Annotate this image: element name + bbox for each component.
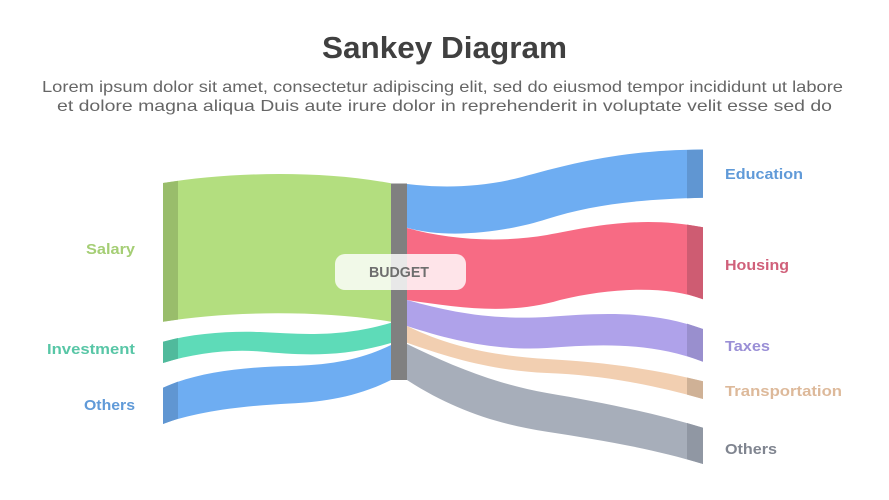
label: investment: Investment [47,341,135,358]
budget label pill [335,254,466,290]
right labels [725,166,842,458]
housing dark end [687,225,703,299]
label: others out: Others [725,441,777,458]
label: transportation: Transportation [725,383,842,400]
sankey diagram [163,150,703,464]
label: salary: Salary [86,241,136,258]
flow: salary [163,174,391,322]
flow: others out [407,344,703,464]
label: education: Education [725,166,803,183]
salary dark end [163,181,178,322]
budget label pill: BUDGET [369,265,429,281]
flow: transportation [407,326,703,399]
flow: investment [163,323,391,363]
flow: taxes [407,300,703,362]
subtitle text block: Lorem ipsum dolor sit amet, consectetur adipiscing elit, sed do eiusmod tempor incididunt ut labore [42,79,843,96]
label: taxes: Taxes [725,338,770,355]
flow: housing [407,222,703,309]
left labels [47,241,136,414]
subtitle text block: et dolore magna aliqua Duis aute irure dolor in reprehenderit in voluptate velit esse sed do [57,98,832,115]
label: others in: Others [84,397,135,414]
title: Sankey Diagram [322,30,567,65]
transportation dark end [687,378,703,399]
investment dark end [163,338,178,363]
subtitle text block [42,79,843,115]
others out dark end [687,423,703,464]
others in dark end [163,382,178,424]
flow: education [407,150,703,234]
taxes dark end [687,324,703,362]
education dark end [687,150,703,198]
flow: others in [163,345,391,424]
label: housing: Housing [725,257,789,274]
center budget bar [391,184,407,380]
